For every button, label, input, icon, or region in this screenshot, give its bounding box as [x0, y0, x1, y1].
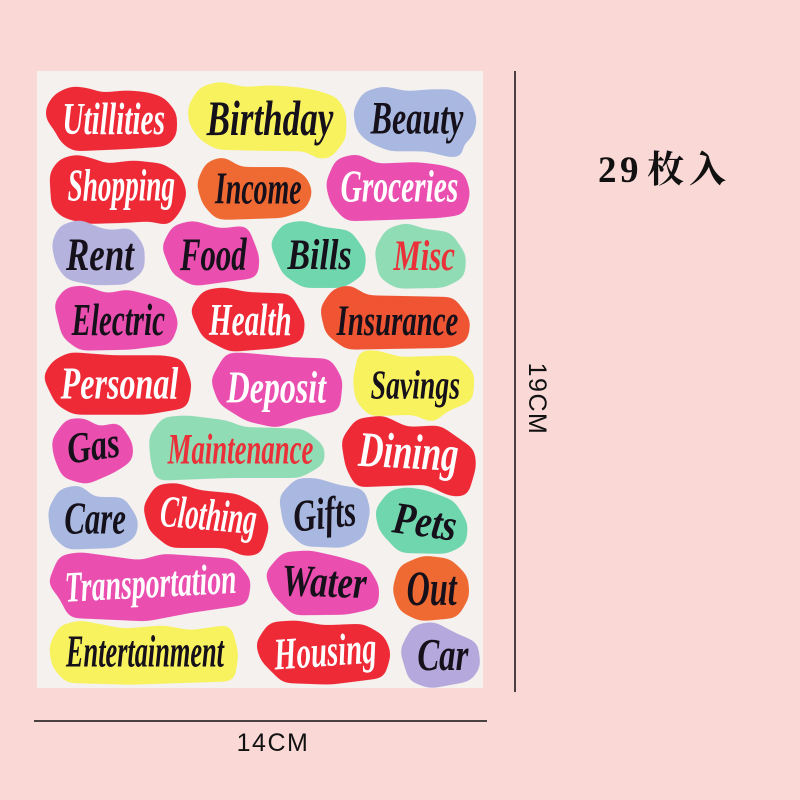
sticker: Insurance: Insurance [336, 297, 458, 345]
sticker: Birthday [189, 83, 345, 157]
sticker: Housing [257, 622, 390, 683]
sticker: Electric [55, 287, 178, 349]
sticker: Savings [354, 352, 473, 422]
sticker: Beauty [354, 87, 476, 156]
sticker: Beauty: Beauty [370, 92, 464, 144]
sticker: Dining [342, 417, 475, 495]
sticker: Food [163, 222, 258, 285]
sticker: Car [401, 623, 479, 687]
count label: 29枚入 [598, 149, 726, 191]
stickers: lower rows [44, 352, 479, 687]
sticker: Transportation [49, 553, 250, 620]
sticker: Rent: Rent [65, 229, 136, 281]
sticker: Car: Car [417, 630, 469, 680]
sticker sheet paper [37, 71, 483, 688]
sticker: Health: Health [208, 295, 292, 345]
sticker: Clothing: Clothing [158, 486, 259, 544]
sticker: Personal: Personal [60, 358, 179, 408]
sticker: Gas [53, 419, 132, 483]
sticker: Bills: Bills [287, 231, 352, 279]
sticker: Personal [44, 353, 191, 413]
sticker: Water [266, 552, 378, 614]
sticker: Transportation: Transportation [64, 555, 238, 612]
sticker: Birthday: Birthday [206, 90, 334, 146]
sticker: Food: Food [179, 229, 247, 281]
sticker: Pets: Pets [389, 492, 460, 551]
sticker: Entertainment: Entertainment [65, 627, 225, 677]
sticker: Health [191, 288, 304, 351]
sticker: Groceries [327, 155, 469, 220]
sticker: Electric: Electric [71, 295, 165, 345]
sticker: Shopping [51, 156, 186, 224]
sticker: Care [49, 486, 137, 548]
sticker: Water: Water [281, 555, 368, 608]
sticker: Entertainment [50, 622, 237, 683]
sticker: Income [198, 158, 312, 218]
sticker: Housing: Housing [272, 622, 378, 680]
sticker: Gifts [280, 479, 369, 547]
sticker: Bills [271, 222, 365, 287]
sticker: Dining: Dining [357, 421, 460, 482]
width dimension: 14CM: 14CM [237, 729, 309, 757]
sticker: Out [393, 557, 468, 620]
sticker: Out: Out [407, 560, 458, 616]
sticker: Maintenance [150, 417, 323, 479]
sticker: Maintenance: Maintenance [167, 425, 313, 473]
sticker: Deposit [212, 354, 342, 427]
sticker: Care: Care [64, 493, 126, 543]
sticker: Utillities [47, 87, 176, 150]
sticker: Groceries: Groceries [341, 162, 458, 212]
sticker: Insurance [321, 286, 469, 348]
height dimension: 19CM: 19CM [523, 363, 551, 435]
sticker: Utillities: Utillities [62, 94, 165, 144]
stickers: upper rows [47, 83, 476, 351]
sticker: Income: Income [214, 163, 302, 213]
sticker: Clothing [144, 484, 268, 555]
sticker: Deposit: Deposit [226, 363, 327, 413]
sticker: Gas: Gas [64, 419, 123, 473]
sticker: Rent [53, 221, 143, 284]
sticker: Misc: Misc [393, 232, 455, 280]
sticker: Gifts: Gifts [291, 485, 358, 542]
sticker: Savings: Savings [371, 362, 460, 408]
sticker: Shopping: Shopping [68, 161, 175, 211]
sticker: Misc [376, 224, 465, 287]
